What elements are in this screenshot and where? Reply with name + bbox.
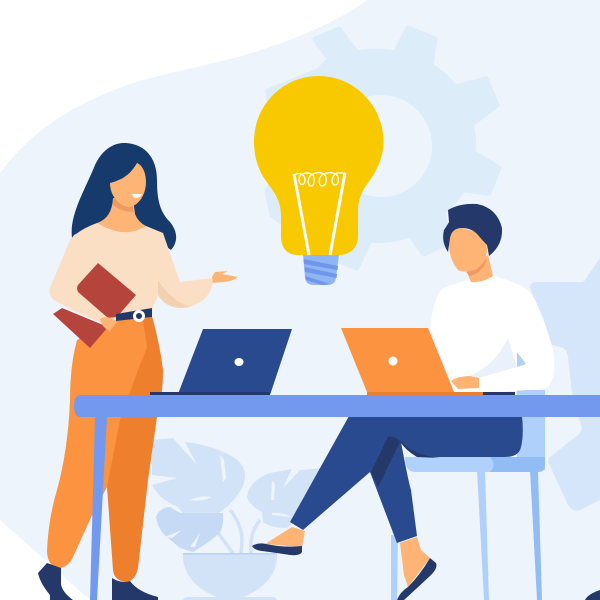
- leaf: right: [247, 468, 322, 528]
- plant: [152, 438, 322, 600]
- plant stems: [218, 510, 260, 553]
- folder front: [77, 263, 136, 318]
- bulb glass: [254, 76, 384, 255]
- gear: right: [530, 258, 600, 510]
- orange laptop: [341, 328, 515, 395]
- woman: [38, 143, 238, 600]
- light bulb: [254, 76, 384, 285]
- table leg: [90, 417, 107, 600]
- shirt shadow: [470, 338, 517, 378]
- face: [110, 163, 146, 207]
- chair back leg: [391, 535, 398, 600]
- gear: large: [267, 28, 499, 268]
- man's hand: [451, 376, 479, 389]
- chair gap: [517, 352, 526, 367]
- neck: [97, 198, 146, 232]
- light leg: [47, 316, 148, 568]
- dark leg: [107, 316, 163, 582]
- hand: [100, 317, 117, 331]
- man's chair: [391, 390, 545, 600]
- chair right leg: [530, 470, 542, 600]
- left shoe: [252, 543, 302, 555]
- table top: [74, 395, 600, 417]
- dark laptop: [150, 329, 292, 395]
- chair back: [517, 390, 545, 470]
- sweater shadow: [158, 280, 190, 308]
- filament: [294, 173, 345, 255]
- leaf: lower: [156, 507, 223, 552]
- right shoe: [397, 558, 436, 600]
- left sock: [38, 563, 73, 600]
- hair: [72, 143, 176, 250]
- leaf: big: [152, 438, 245, 519]
- left foot: [265, 527, 305, 547]
- pot: [183, 554, 277, 600]
- third person shoe: [585, 590, 600, 600]
- belt ring: [134, 312, 144, 320]
- open hand: [212, 271, 238, 283]
- man's trousers: [290, 416, 523, 543]
- bulb base: [303, 254, 339, 285]
- man's hair: [443, 204, 502, 256]
- neck shadow: [466, 258, 487, 276]
- man: [252, 204, 554, 600]
- smile: [132, 194, 142, 198]
- table: [74, 395, 600, 600]
- man's neck: [466, 255, 493, 282]
- chair front leg: [477, 470, 489, 600]
- sleeve cuff: [479, 367, 540, 392]
- folder back: [53, 308, 108, 348]
- man's face: [449, 228, 487, 272]
- chair seat: [405, 457, 496, 472]
- trouser shadow: [371, 437, 440, 487]
- sweater: [50, 223, 213, 323]
- man's shirt: [430, 275, 554, 394]
- orange trousers: [47, 316, 163, 582]
- neck shadow: [113, 198, 133, 212]
- right sock: [112, 578, 158, 600]
- right foot: [400, 537, 430, 587]
- belt: [116, 308, 152, 321]
